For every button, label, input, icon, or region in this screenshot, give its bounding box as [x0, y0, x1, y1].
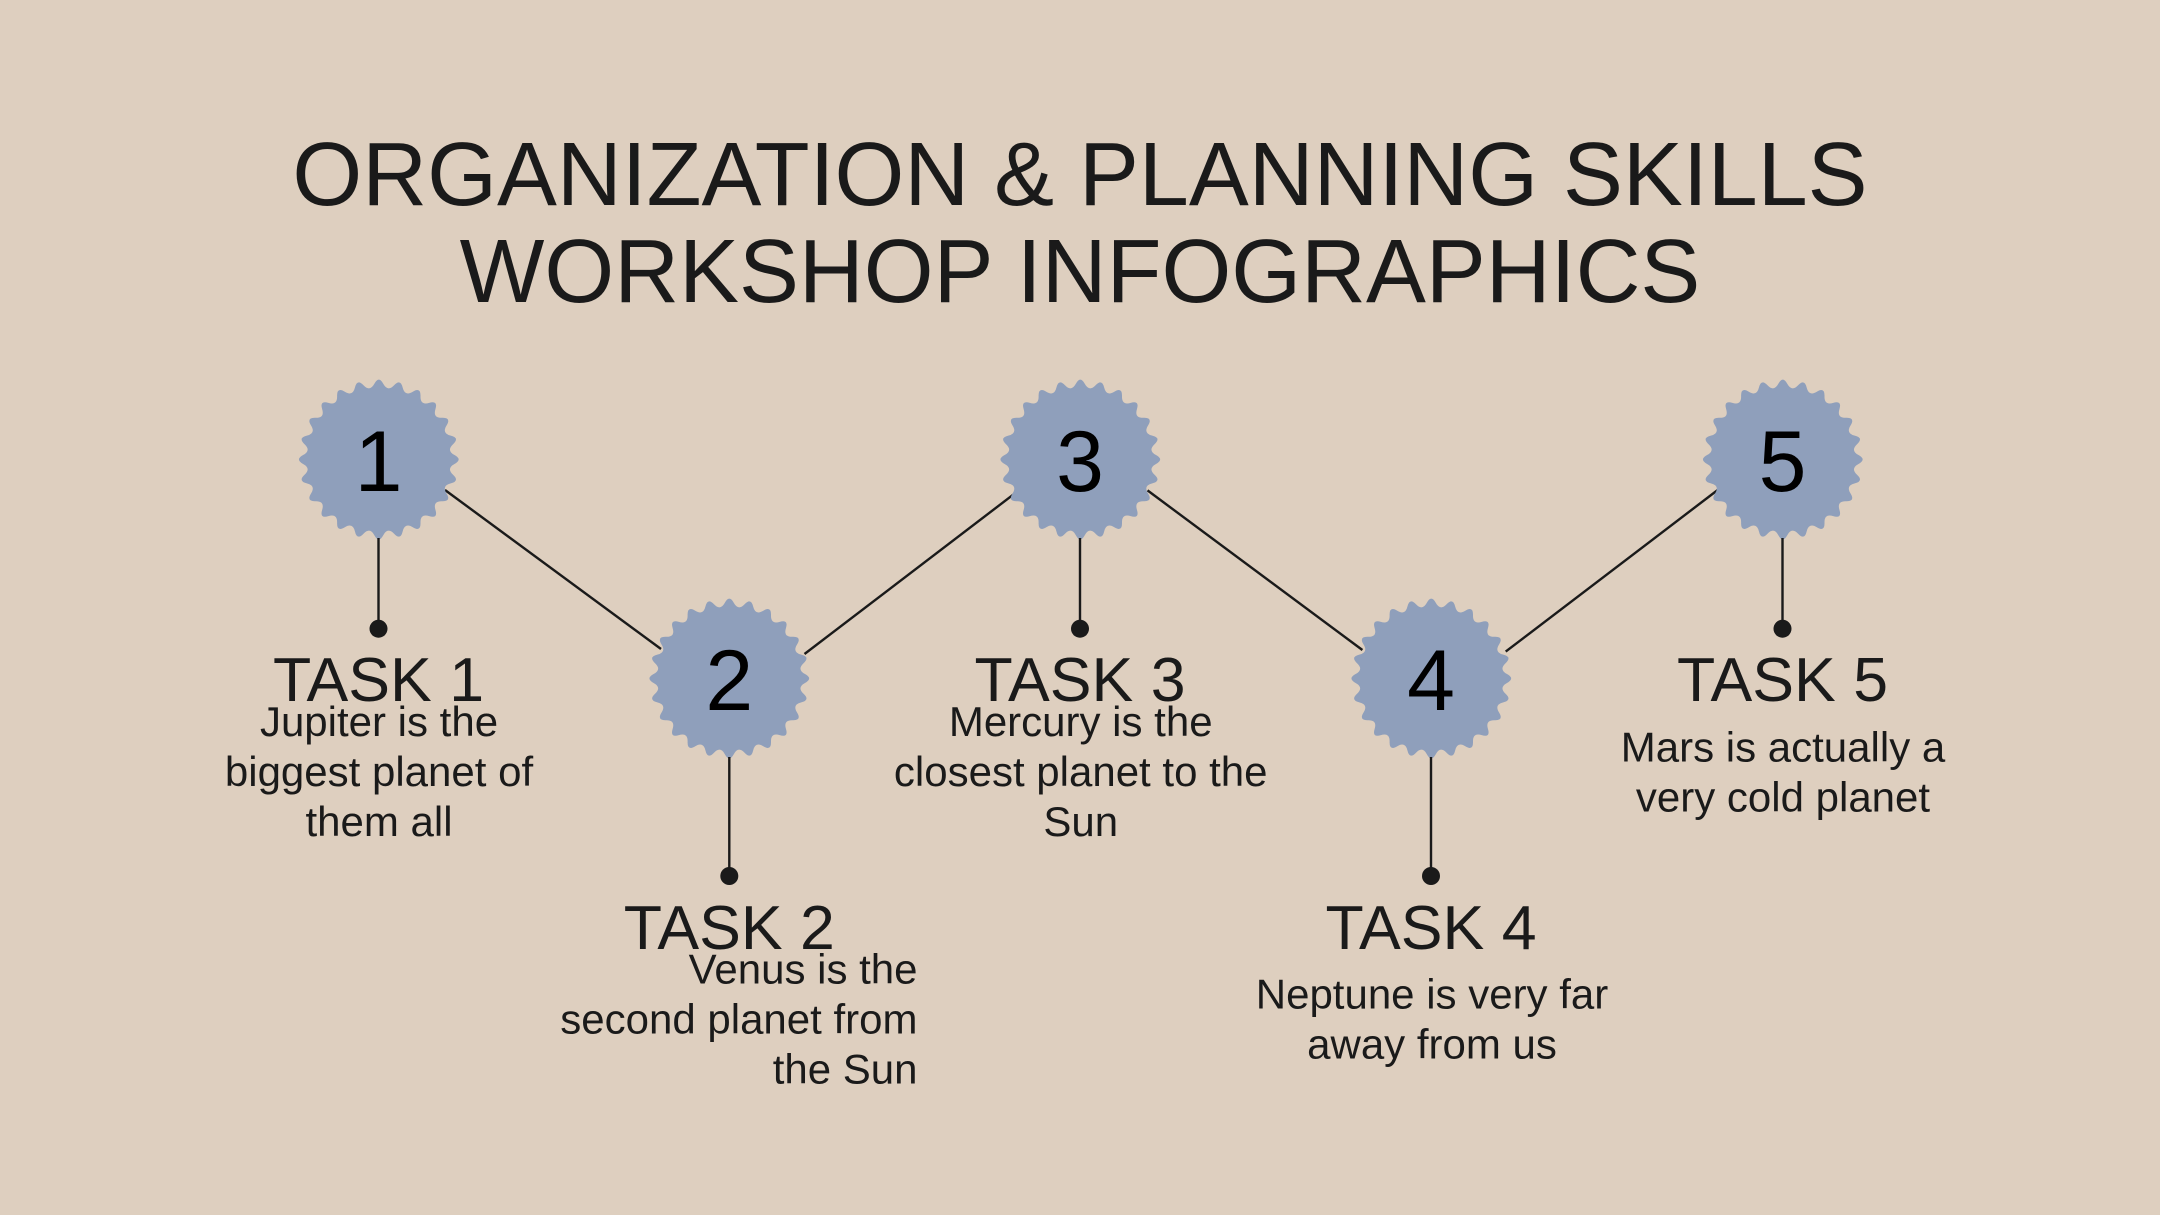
title: ORGANIZATION & PLANNING SKILLS [292, 125, 1868, 225]
panel: task 3 [894, 380, 1267, 845]
connector: badge 4 to badge 5 [1506, 489, 1719, 652]
badge 1 [299, 380, 459, 539]
text: task 3 description: Mercury is the [949, 698, 1213, 745]
text: task 4 description: Neptune is very far [1256, 970, 1608, 1018]
text: task 5 description [1621, 724, 1946, 820]
heading: task 3: TASK 3 [974, 645, 1186, 715]
heading: task 2: TASK 2 [624, 893, 835, 963]
panel: task 2 [560, 599, 918, 1092]
heading: task 1: TASK 1 [273, 645, 484, 715]
text: task 3 description: closest planet to the [894, 748, 1267, 795]
stem and dot 2 [720, 757, 738, 885]
title: WORKSHOP INFOGRAPHICS [460, 222, 1700, 322]
text: task 5 description: very cold planet [1636, 774, 1930, 820]
panel: task 4 [1256, 599, 1608, 1068]
stem and dot 4 [1422, 757, 1440, 885]
stem and dot 1 [370, 538, 388, 638]
panel: task 5 [1621, 380, 1946, 820]
text: task 2 description: Venus is the [689, 946, 918, 992]
connector: badge 3 to badge 4 [1148, 490, 1362, 650]
text: task 3 description [894, 698, 1267, 845]
text: task 3 description: Sun [1043, 798, 1118, 845]
badge 3: 3 [1056, 414, 1104, 510]
connector: badge 2 to badge 3 [804, 491, 1018, 654]
badge 4 [1351, 599, 1511, 758]
badge 2 [649, 599, 809, 758]
text: task 5 description: Mars is actually a [1621, 724, 1946, 770]
panel: task 1 [225, 380, 533, 845]
text: task 1 description: biggest planet of [225, 748, 533, 795]
stem and dot 3 [1071, 538, 1089, 638]
text: task 1 description: Jupiter is the [260, 698, 498, 745]
text: task 1 description [225, 698, 533, 845]
badge 3 [1000, 380, 1160, 539]
stem and dot 5 [1774, 538, 1792, 638]
connector: badge 1 to badge 2 [445, 490, 661, 649]
text: task 4 description: away from us [1307, 1020, 1557, 1068]
text: task 4 description [1256, 970, 1608, 1068]
title [292, 125, 1868, 322]
badge 4: 4 [1407, 633, 1455, 729]
heading: task 5: TASK 5 [1677, 645, 1888, 715]
text: task 2 description [560, 946, 918, 1092]
badge 1: 1 [355, 414, 402, 510]
text: task 2 description: the Sun [773, 1046, 918, 1092]
text: task 1 description: them all [305, 798, 453, 845]
badge 2: 2 [705, 633, 753, 729]
heading: task 4: TASK 4 [1325, 893, 1537, 963]
badge 5 [1703, 380, 1863, 539]
badge 5: 5 [1759, 414, 1806, 510]
text: task 2 description: second planet from [560, 996, 918, 1042]
